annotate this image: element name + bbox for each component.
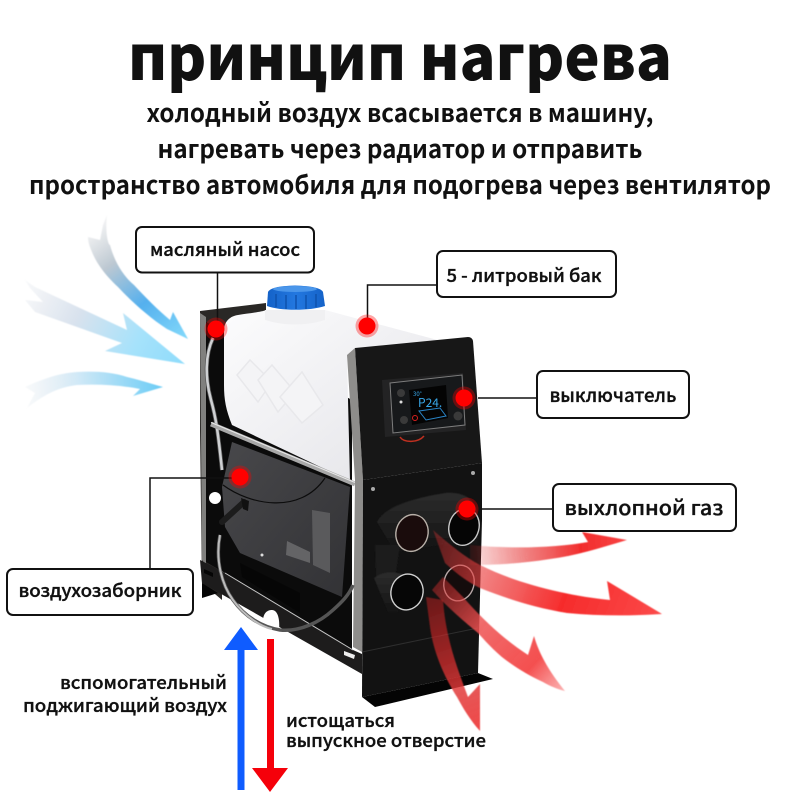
text: auxiliary ignition air: вспомогательный [60, 669, 227, 695]
text: exhaust outlet [286, 707, 486, 753]
text: exhaust outlet: истощаться [286, 707, 395, 733]
label: oil pump: масляный насос [150, 236, 300, 262]
label: air intake [7, 569, 193, 615]
base tray [200, 560, 362, 674]
heater unit illustration [200, 286, 493, 707]
silver rail [211, 424, 355, 484]
text: auxiliary ignition air [23, 669, 228, 718]
subtitle text block: нагревать через радиатор и отправить [158, 130, 642, 166]
text: auxiliary ignition air: поджигающий воздух [23, 692, 228, 718]
base foot [362, 673, 493, 707]
hot air arrows [426, 530, 662, 731]
label: oil pump [136, 227, 314, 272]
label: tank: 5 - литровый бак [446, 262, 602, 288]
gas hose [218, 535, 353, 630]
heater unit illustration: 30° [413, 389, 422, 398]
screws [371, 487, 375, 491]
label: exhaust gas [553, 484, 736, 531]
tank embossed diamonds [237, 360, 323, 423]
label: switch: выключатель [550, 381, 676, 408]
black support block [240, 563, 300, 613]
connector lines [150, 272, 553, 569]
subtitle text block: пространство автомобиля для подогрева через вентилятор [29, 166, 771, 202]
heater unit illustration: P24. [418, 394, 442, 411]
front panel upper [355, 337, 482, 480]
silver oil tube [207, 338, 222, 470]
subtitle text block [29, 94, 771, 202]
interior [206, 322, 352, 650]
back frame [200, 303, 266, 600]
tank neck and cap [265, 310, 325, 324]
red down arrow [252, 639, 288, 792]
exhaust ducts [374, 493, 478, 612]
blue up arrow [224, 627, 258, 790]
subtitle text block: холодный воздух всасывается в машину, [146, 94, 654, 130]
label: air intake: воздухозаборник [18, 577, 182, 603]
front panel side strip [347, 348, 363, 652]
title: принцип нагрева [128, 8, 672, 98]
heater body [222, 442, 350, 597]
red marker dots [204, 314, 478, 520]
label: exhaust gas: выхлопной газ [564, 492, 724, 521]
cold air arrows [25, 215, 188, 408]
fuel tank [224, 310, 445, 481]
text: exhaust outlet: выпускное отверстие [286, 727, 486, 753]
controller [382, 373, 466, 437]
front panel lower [362, 463, 482, 697]
label: switch [537, 371, 689, 418]
label: tank [437, 251, 616, 297]
